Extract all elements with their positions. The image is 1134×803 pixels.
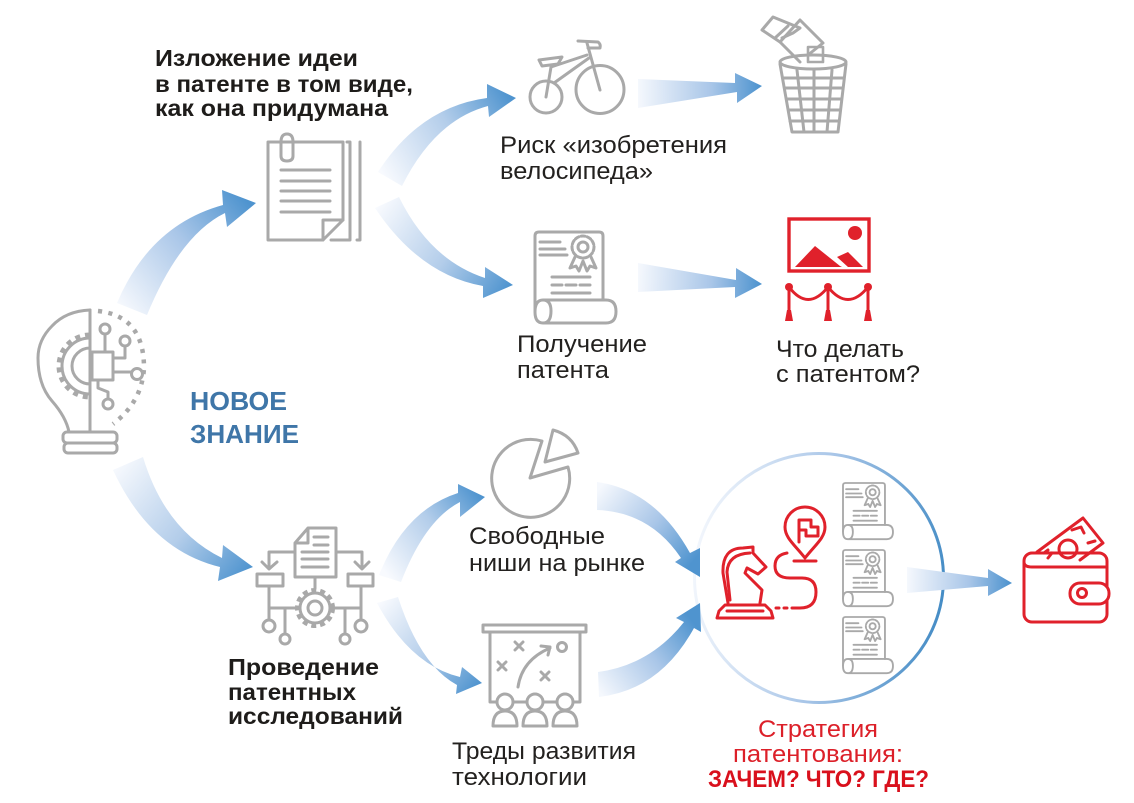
text: conducting patent research: Проведение (228, 654, 379, 680)
text: free market niches (469, 523, 645, 577)
icon: light bulb with gear and chip (38, 310, 144, 453)
heading: new knowledge: ЗНАНИЕ (190, 419, 299, 449)
icon: pie chart with slice (492, 430, 578, 517)
arrow: patent to museum (638, 263, 762, 298)
text: what to do with a patent: с патентом? (776, 361, 920, 388)
text: bicycle risk: велосипеда» (500, 158, 653, 185)
icon: bicycle (530, 41, 624, 114)
arrow: niches to strategy (597, 482, 700, 577)
heading: new knowledge: НОВОЕ (190, 386, 287, 416)
text: obtaining a patent (517, 331, 647, 384)
icon: patent research flow (257, 528, 373, 644)
text: free market niches: ниши на рынке (469, 550, 645, 577)
icon: document with paperclip (268, 134, 360, 240)
icon: chess knight with route and flag pin (717, 507, 825, 618)
text: idea as conceived: в патенте в том виде, (155, 71, 413, 97)
text: idea as conceived: как она придумана (155, 95, 388, 121)
text: obtaining a patent: Получение (517, 331, 647, 358)
text: patenting strategy: патентования: (733, 741, 903, 768)
text: patenting strategy: ЗАЧЕМ? ЧТО? ГДЕ? (708, 766, 929, 793)
text: idea as conceived (155, 45, 413, 121)
icon: hand throwing paper in trash (762, 17, 846, 132)
arrow: strategy to wallet (907, 567, 1012, 596)
text: what to do with a patent (776, 336, 920, 388)
strategy circle (694, 454, 944, 702)
text: conducting patent research: исследований (228, 703, 403, 729)
text: patenting strategy (708, 716, 929, 793)
arrow: trends to strategy (598, 603, 701, 697)
text: free market niches: Свободные (469, 523, 605, 550)
heading: new knowledge (190, 386, 299, 449)
arrow: document to bicycle (378, 84, 516, 186)
text: obtaining a patent: патента (517, 357, 610, 384)
text: idea as conceived: Изложение идеи (155, 45, 358, 71)
text: bicycle risk: Риск «изобретения (500, 132, 727, 159)
icon: patent in strategy (middle) (843, 550, 893, 606)
icon: museum picture with rope barrier (785, 219, 872, 321)
arrow: document to patent (375, 197, 513, 298)
text: conducting patent research (228, 654, 403, 729)
text: technology trends: Треды развития (452, 738, 636, 765)
text: what to do with a patent: Что делать (776, 336, 904, 363)
icon: patent document (535, 232, 616, 323)
arrow: research to free niches (379, 484, 485, 582)
text: bicycle risk (500, 132, 727, 185)
arrow: idea to patent draft (117, 190, 256, 315)
icon: wallet with money (1024, 518, 1109, 622)
icon: presentation board with audience (483, 625, 586, 726)
text: conducting patent research: патентных (228, 679, 356, 705)
arrow: research to trends (377, 597, 482, 694)
icon: patent in strategy (bottom) (843, 617, 893, 673)
arrow: idea to patent research (113, 457, 253, 581)
text: technology trends: технологии (452, 764, 587, 791)
arrow: bicycle to trash (638, 73, 762, 108)
text: technology trends (452, 738, 636, 791)
icon: patent in strategy (top) (843, 483, 893, 539)
text: patenting strategy: Стратегия (758, 716, 878, 743)
